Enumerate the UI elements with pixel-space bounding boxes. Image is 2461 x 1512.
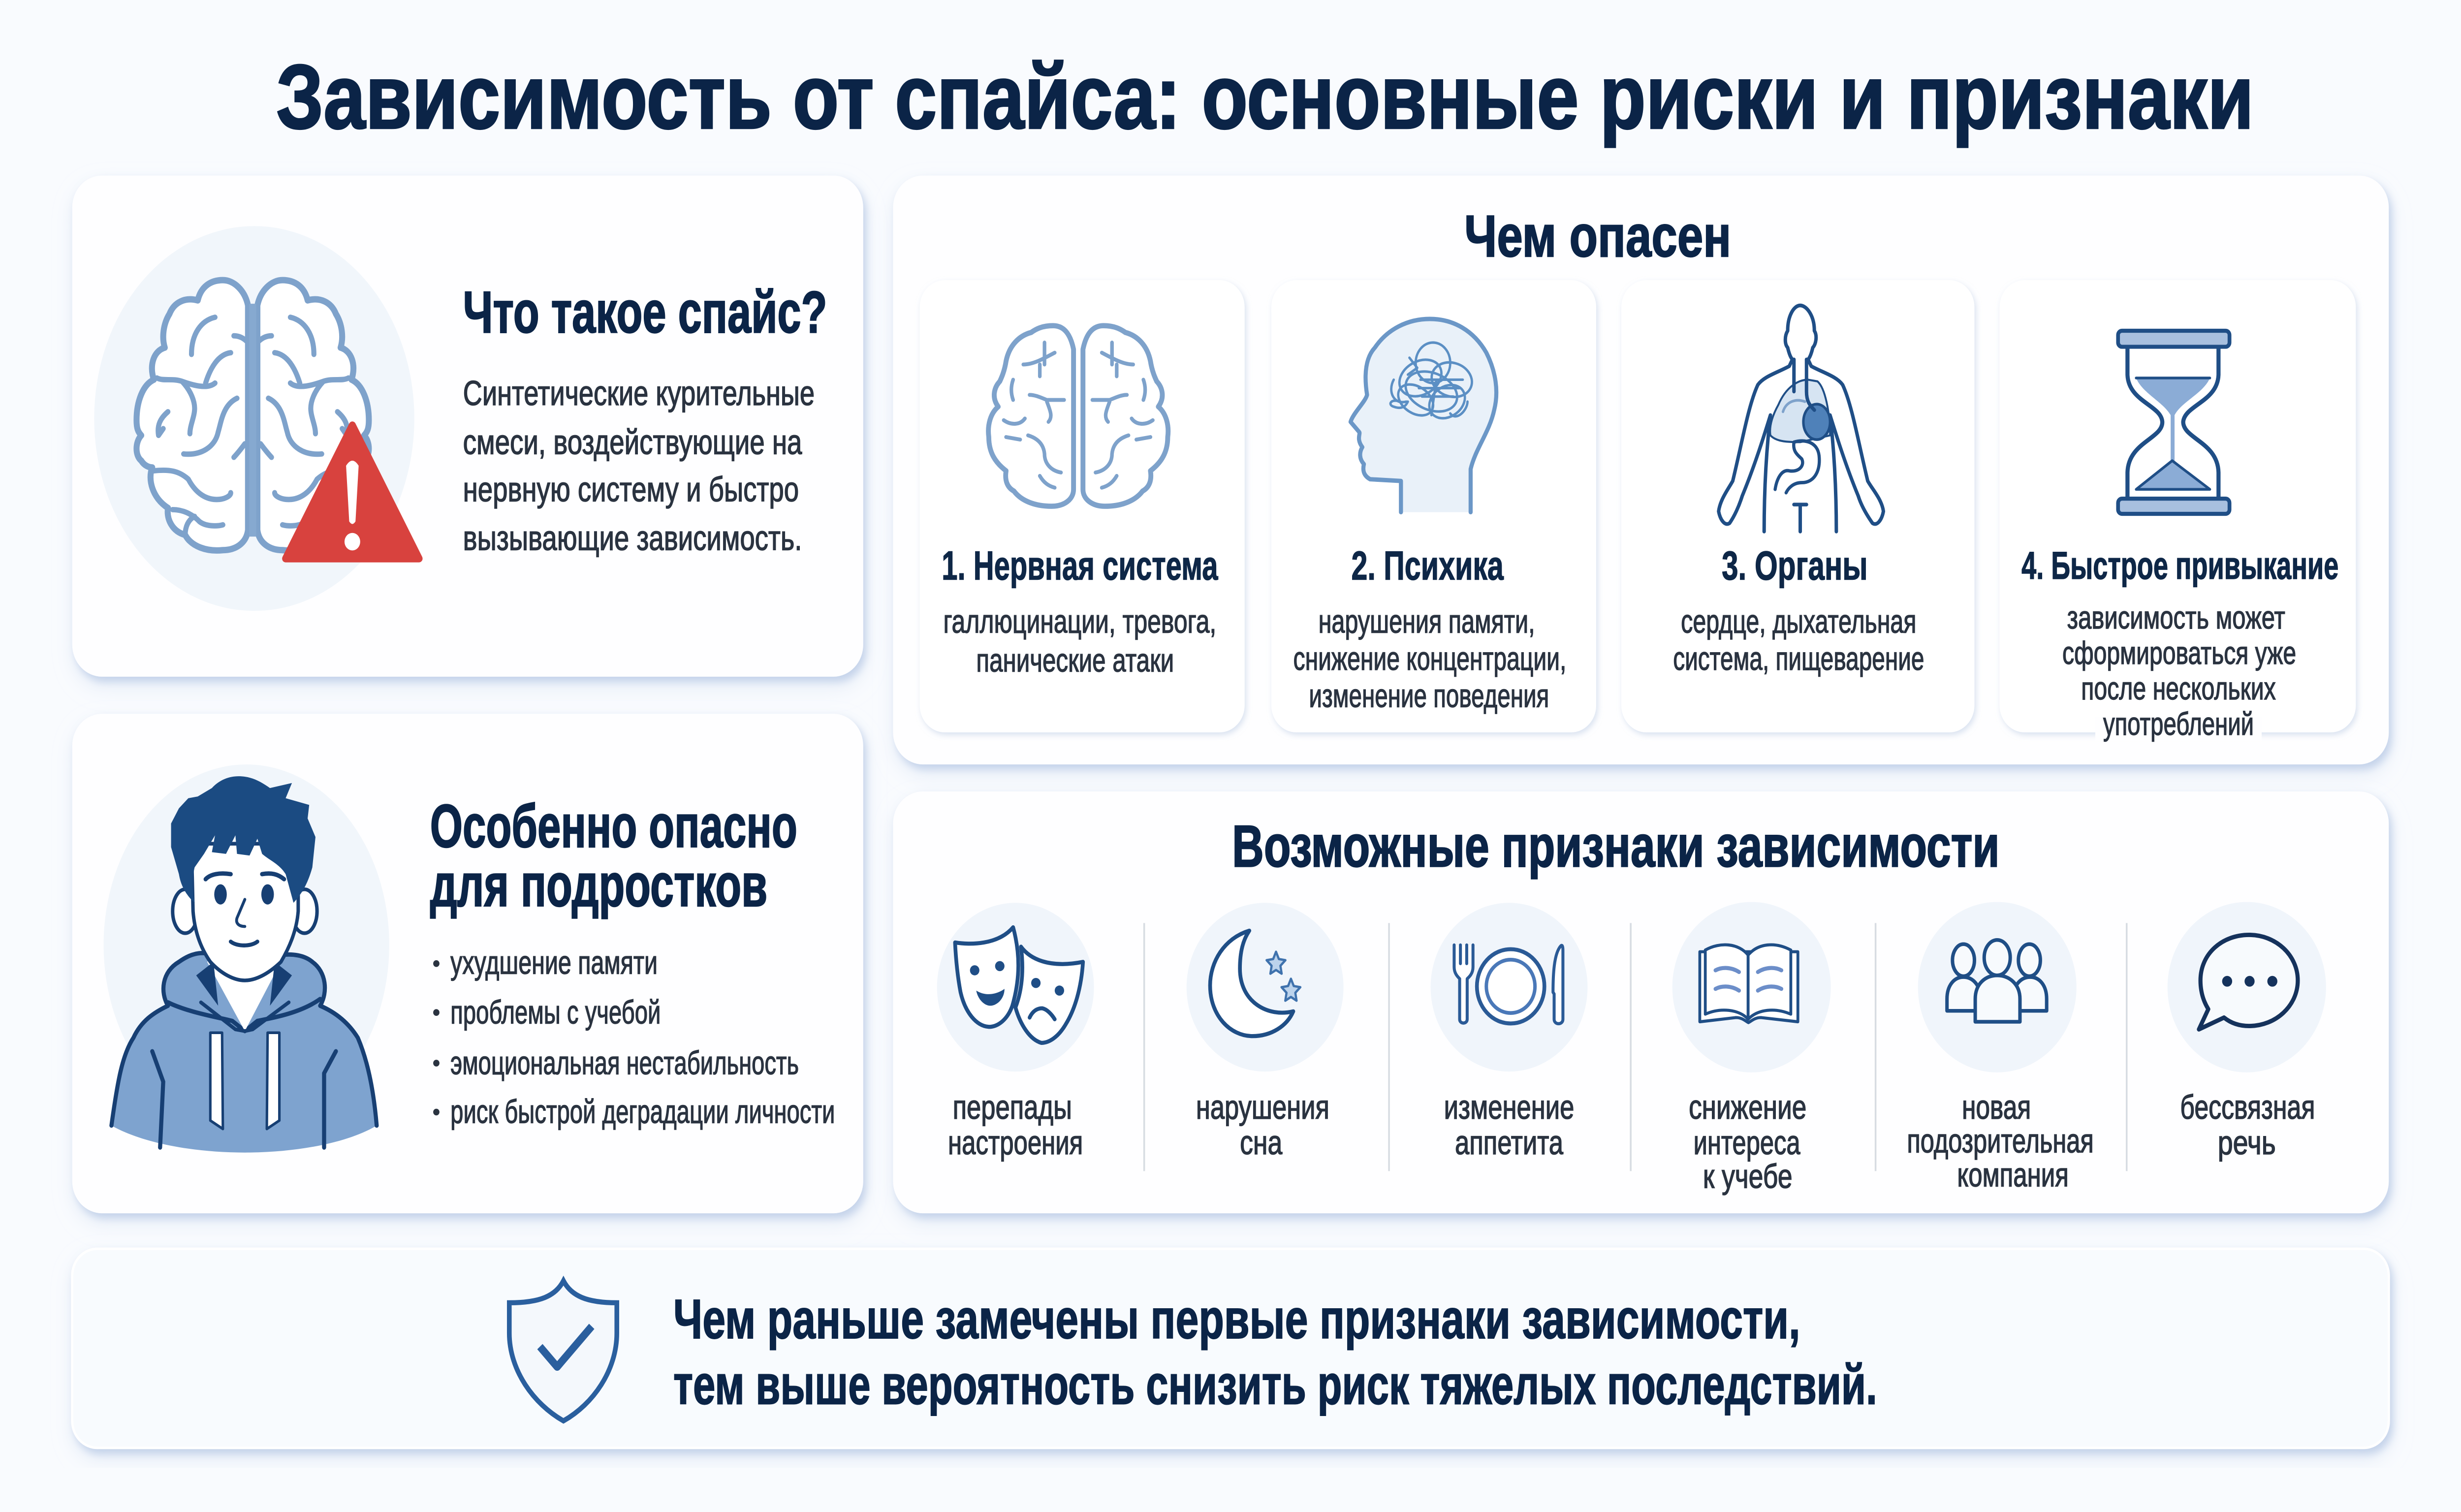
- item: new suspicious company: [1907, 902, 2094, 1194]
- text block: spice description: вызывающие зависимость.: [463, 520, 802, 558]
- panel: why it is dangerous: [893, 176, 2389, 764]
- item: appetite change: [1431, 903, 1587, 1162]
- icon: human body with organs: [1719, 306, 1884, 532]
- icon: group of people: [1918, 902, 2077, 1072]
- label: new suspicious company: подозрительная: [1907, 1123, 2094, 1160]
- card text: fast addiction: [2062, 600, 2296, 742]
- card text: nervous system: [943, 603, 1216, 679]
- icon: head with tangled thoughts: [1351, 319, 1496, 512]
- label: appetite change: аппетита: [1455, 1124, 1563, 1162]
- text block: spice description: нервную систему и быстро: [463, 471, 799, 509]
- label: sleep problems: сна: [1240, 1124, 1282, 1162]
- icon: speech bubble: [2168, 902, 2326, 1072]
- item: mood swings: [937, 903, 1094, 1162]
- card: organs: [1621, 280, 1974, 732]
- icon: brain with warning sign: [94, 226, 419, 611]
- label: incoherent speech: [2180, 1089, 2315, 1162]
- card: fast addiction: [1999, 280, 2356, 742]
- item: sleep problems: [1187, 903, 1344, 1162]
- icon: open book: [1672, 902, 1831, 1072]
- banner background: [72, 1249, 2389, 1448]
- heading: possible signs: Возможные признаки зависимости: [1232, 813, 1999, 879]
- card text: psyche: нарушения памяти,: [1319, 603, 1535, 640]
- panel background: teenagers: [72, 714, 863, 1213]
- title: Зависимость от спайса: основные риски и признаки: [276, 46, 2254, 148]
- label: loss of interest in study: интереса: [1694, 1124, 1800, 1162]
- card text: psyche: изменение поведения: [1309, 678, 1549, 714]
- panel background: what is spice: [72, 176, 863, 677]
- panel: teenagers: [72, 714, 863, 1213]
- bullet list: risks for teens: проблемы с учебой: [450, 994, 661, 1031]
- heading: especially dangerous for teens: для подростков: [430, 851, 767, 919]
- label: mood swings: перепады: [953, 1089, 1072, 1127]
- bullet list: risks for teens: [433, 944, 835, 1130]
- card text: fast addiction: употреблений: [2103, 706, 2254, 742]
- panel: bottom call-out banner: [72, 1249, 2389, 1448]
- card heading: organs: 3. Органы: [1722, 543, 1868, 588]
- card text: nervous system: панические атаки: [976, 642, 1174, 679]
- panel background: why it is dangerous: [893, 176, 2389, 764]
- label: loss of interest in study: снижение: [1689, 1089, 1806, 1127]
- icon: theatre masks: [937, 903, 1094, 1071]
- card text: nervous system: галлюцинации, тревога,: [943, 603, 1216, 640]
- label: sleep problems: нарушения: [1196, 1089, 1329, 1127]
- label: incoherent speech: бессвязная: [2180, 1089, 2315, 1127]
- heading: why it is dangerous: Чем опасен: [1464, 203, 1731, 269]
- card heading: nervous system: 1. Нервная система: [942, 543, 1218, 588]
- label: loss of interest in study: к учебе: [1703, 1158, 1793, 1196]
- card text: psyche: снижение концентрации,: [1294, 640, 1566, 677]
- text block: spice description: смеси, воздействующие на: [463, 423, 802, 462]
- text block: spice description: [463, 375, 815, 558]
- label: new suspicious company: компания: [1957, 1156, 2069, 1194]
- card heading: psyche: 2. Психика: [1352, 543, 1504, 588]
- label: mood swings: [948, 1089, 1083, 1162]
- bullet list: risks for teens: эмоциональная нестабильность: [450, 1044, 799, 1081]
- card text: fast addiction: после нескольких: [2081, 671, 2276, 707]
- icon: moon and stars: [1187, 903, 1344, 1071]
- bullet list: risks for teens: ухудшение памяти: [450, 944, 658, 981]
- label: incoherent speech: речь: [2218, 1124, 2276, 1162]
- item: incoherent speech: [2168, 902, 2326, 1162]
- label: new suspicious company: [1907, 1089, 2094, 1194]
- callout text: [673, 1288, 1877, 1416]
- panel: possible signs of addiction: [893, 791, 2389, 1213]
- label: new suspicious company: новая: [1962, 1089, 2031, 1127]
- heading: especially dangerous for teens: [430, 792, 797, 919]
- card text: organs: сердце, дыхательная: [1681, 603, 1916, 640]
- heading: especially dangerous for teens: Особенно опасно: [430, 792, 797, 860]
- bullet list: risks for teens: риск быстрой деградации личности: [450, 1094, 835, 1130]
- card: psyche: [1271, 280, 1596, 732]
- label: mood swings: настроения: [948, 1124, 1083, 1162]
- card: nervous system: [920, 280, 1245, 732]
- callout text: Чем раньше замечены первые признаки зависимости,: [673, 1288, 1800, 1351]
- item: loss of interest in study: [1672, 902, 1831, 1196]
- card text: fast addiction: сформироваться уже: [2062, 635, 2296, 671]
- callout text: тем выше вероятность снизить риск тяжелых последствий.: [673, 1354, 1877, 1416]
- heading: what is spice: Что такое спайс?: [463, 279, 827, 345]
- panel: what is spice: [72, 176, 863, 677]
- label: appetite change: изменение: [1444, 1089, 1574, 1127]
- card text: fast addiction: зависимость может: [2067, 600, 2285, 636]
- card heading: fast addiction: 4. Быстрое привыкание: [2021, 544, 2338, 588]
- card text: organs: система, пищеварение: [1673, 640, 1924, 677]
- text block: spice description: Синтетические курительные: [463, 375, 815, 412]
- icon: brain: [988, 326, 1168, 506]
- label: sleep problems: [1196, 1089, 1329, 1162]
- card text: psyche: [1294, 603, 1566, 714]
- icon: hourglass: [2118, 331, 2230, 514]
- card text: organs: [1673, 603, 1924, 677]
- panel background: possible signs: [893, 791, 2389, 1213]
- icon: teenager in hoodie: [103, 764, 389, 1153]
- icon: shield with check mark: [509, 1281, 617, 1421]
- icon: plate with fork and knife: [1431, 903, 1587, 1071]
- label: appetite change: [1444, 1089, 1574, 1162]
- label: loss of interest in study: [1689, 1089, 1806, 1196]
